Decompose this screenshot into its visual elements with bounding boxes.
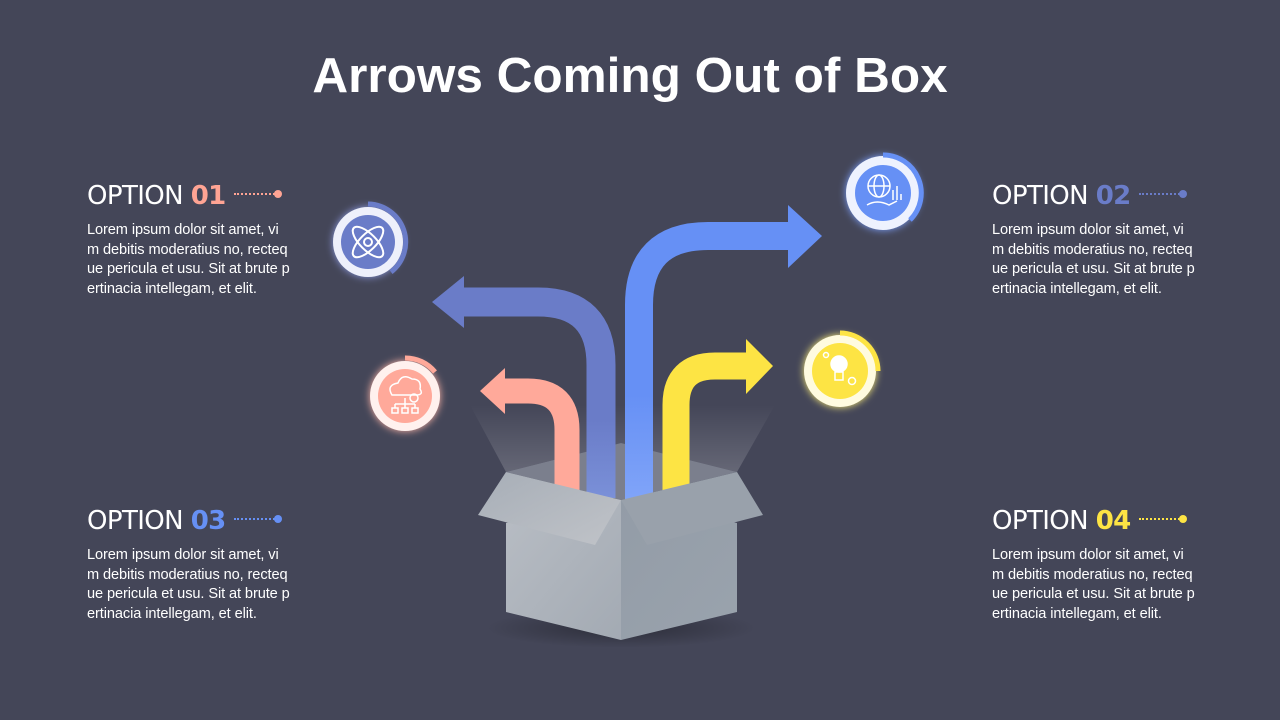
heading 04: OPTION 04 (992, 506, 1131, 536)
text 01: Lorem ipsum dolor sit amet, vi (87, 222, 279, 238)
panel: option 01 (87, 181, 290, 296)
text 03: ertinacia intellegam, et elit. (87, 606, 257, 622)
heading 03: OPTION 03 (87, 506, 226, 536)
heading 02: OPTION 02 (992, 181, 1131, 211)
icon 04: bulb (804, 333, 878, 407)
heading 01: OPTION 01 (87, 181, 226, 211)
arrow: blue (639, 205, 822, 500)
text 01: ue pericula et usu. Sit at brute p (87, 261, 290, 277)
text 02: m debitis moderatius no, recteq (992, 242, 1193, 258)
panel: option 03 (87, 506, 290, 622)
text 04 (992, 547, 1195, 622)
arrow: pink (480, 368, 567, 492)
text 03: m debitis moderatius no, recteq (87, 566, 288, 582)
icon 03: cloud network (370, 358, 440, 431)
icon 01: atom (333, 204, 406, 277)
text 04: ertinacia intellegam, et elit. (992, 606, 1162, 622)
text 02: ertinacia intellegam, et elit. (992, 280, 1162, 296)
panel: option 02 (992, 181, 1195, 296)
text 04: m debitis moderatius no, recteq (992, 566, 1193, 582)
text 03 (87, 547, 290, 622)
text 03: Lorem ipsum dolor sit amet, vi (87, 547, 279, 563)
box back interior (506, 443, 737, 500)
text 01 (87, 222, 290, 296)
arrow: yellow (676, 339, 773, 490)
title: Arrows Coming Out of Box (312, 48, 948, 103)
text 03: ue pericula et usu. Sit at brute p (87, 586, 290, 602)
text 04: Lorem ipsum dolor sit amet, vi (992, 547, 1184, 563)
box shadow (486, 608, 756, 648)
text 01: ertinacia intellegam, et elit. (87, 280, 257, 296)
text 01: m debitis moderatius no, recteq (87, 242, 288, 258)
text 02: Lorem ipsum dolor sit amet, vi (992, 222, 1184, 238)
panel: option 04 (992, 506, 1195, 622)
arrow: dark blue (432, 276, 601, 498)
text 02 (992, 222, 1195, 296)
box (478, 472, 763, 640)
light beam (470, 405, 775, 472)
text 04: ue pericula et usu. Sit at brute p (992, 586, 1195, 602)
icon 02: globe hand (846, 155, 921, 230)
text 02: ue pericula et usu. Sit at brute p (992, 261, 1195, 277)
